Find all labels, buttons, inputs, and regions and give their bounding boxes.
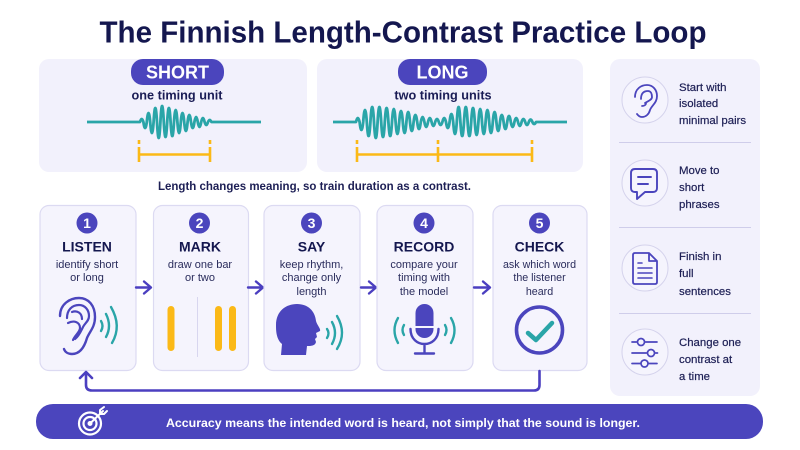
arrow: listen to mark (136, 282, 151, 294)
badge: long (398, 59, 487, 85)
timing bar: two units (357, 140, 532, 162)
text: isolated minimal pairs: minimal pairs (679, 115, 746, 127)
description: mark: or two (185, 272, 215, 284)
icon: one bar and two bars (168, 297, 236, 357)
subtitle: Length changes meaning, so train duration as a contrast. (158, 179, 471, 193)
icon: document (622, 245, 668, 291)
item: full sentences (622, 245, 731, 298)
text: short phrases: phrases (679, 199, 720, 211)
card 1: listen (40, 206, 136, 370)
text: one contrast at a time: a time (679, 371, 710, 383)
title: The Finnish Length-Contrast Practice Loop (100, 14, 706, 50)
arrow: say to record (361, 282, 376, 294)
step number 4: 4 (420, 215, 428, 231)
timing bar: one unit (139, 140, 210, 162)
arrow: feedback loop from check to listen (80, 371, 540, 390)
caption: two timing units: two timing units (394, 88, 492, 102)
panel: short (39, 59, 307, 172)
description: record: timing with (398, 272, 450, 284)
panel: progression sidebar (610, 59, 760, 396)
icon: target with arrow (79, 407, 107, 434)
step number 3 (301, 212, 322, 234)
card 3: say (264, 206, 360, 370)
description: say: keep rhythm, (280, 259, 343, 271)
badge: long: LONG (416, 62, 468, 82)
icon: check mark in circle (516, 307, 562, 353)
card 2: mark (154, 206, 248, 370)
step number 5 (529, 212, 550, 234)
description: check: the listener (513, 272, 566, 284)
text: isolated minimal pairs: Start with (679, 82, 726, 94)
text: full sentences: sentences (679, 286, 731, 298)
step number 2 (189, 212, 210, 234)
heading: check: CHECK (515, 238, 564, 254)
description: check: heard (526, 286, 553, 298)
caption: one timing unit: one timing unit (132, 88, 223, 102)
step number 3: 3 (308, 215, 316, 231)
panel: long (317, 59, 583, 172)
waveform: short (87, 106, 261, 138)
description: record: compare your (390, 259, 458, 271)
description: say: length (297, 286, 326, 298)
arrow: record to check (474, 282, 490, 294)
item: isolated minimal pairs (622, 77, 746, 127)
step number 4 (414, 212, 434, 234)
description: check: ask which word (503, 259, 576, 271)
icon: microphone (394, 304, 454, 354)
text: full sentences: Finish in (679, 251, 721, 263)
description: mark: draw one bar (168, 259, 232, 271)
card 5: check (493, 206, 587, 370)
step number 5: 5 (536, 215, 544, 231)
heading: say: SAY (298, 238, 326, 254)
text: one contrast at a time: contrast at (679, 354, 733, 366)
heading: record: RECORD (394, 238, 454, 254)
description: say: change only (282, 272, 342, 284)
text: full sentences: full (679, 268, 694, 280)
description: record: the model (400, 286, 448, 298)
waveform: long (333, 107, 567, 138)
item: short phrases (622, 160, 720, 211)
bottom banner (36, 404, 763, 439)
icon: speaking head (276, 304, 342, 355)
icon: ear with sound waves (60, 298, 117, 354)
step number 2: 2 (196, 215, 204, 231)
heading: mark: MARK (179, 238, 221, 254)
description: listen: identify short (56, 259, 118, 271)
badge: short (131, 59, 224, 85)
step number 1: 1 (83, 215, 91, 231)
icon: speech bubble (622, 160, 668, 206)
badge: short: SHORT (146, 62, 209, 82)
icon: ear (622, 77, 668, 123)
arrow: mark to say (248, 282, 263, 294)
heading: listen: LISTEN (62, 238, 112, 254)
icon: sliders (622, 329, 668, 375)
step number 1 (76, 212, 98, 234)
text: one contrast at a time: Change one (679, 337, 741, 349)
banner text: Accuracy means the intended word is heard, not simply that the sound is longer. (166, 416, 640, 430)
text: short phrases: short (679, 182, 705, 194)
description: listen: or long (70, 272, 104, 284)
text: short phrases: Move to (679, 165, 720, 177)
card 4: record (377, 206, 473, 370)
text: isolated minimal pairs: isolated (679, 98, 718, 110)
item: one contrast at a time (622, 329, 741, 383)
